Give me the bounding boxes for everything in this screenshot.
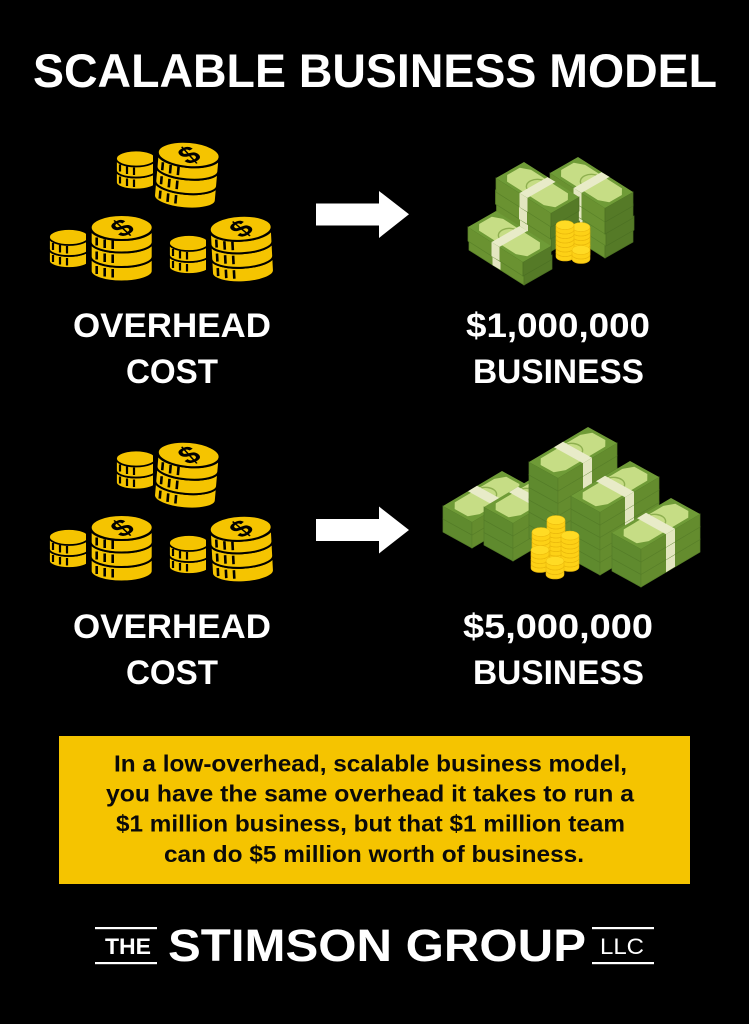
label: overhead cost, row 2 [73, 608, 271, 692]
callout text: can do $5 million worth of business. [164, 841, 584, 867]
label: $5,000,000 business: BUSINESS [473, 654, 644, 692]
label: $1,000,000 business: $1,000,000 [466, 307, 650, 345]
logo: The Stimson Group LLC [95, 920, 654, 971]
callout text [106, 750, 634, 867]
icon: overhead coins, row 2: $ [104, 514, 141, 543]
logo: The Stimson Group LLC: STIMSON GROUP [168, 920, 586, 971]
icon: money stacks, $5,000,000 [443, 427, 700, 587]
arrow, row 2 [316, 506, 409, 554]
title: SCALABLE BUSINESS MODEL [33, 44, 717, 97]
label: $1,000,000 business: BUSINESS [473, 353, 644, 391]
icon: overhead coins, row 2: $ [223, 515, 261, 543]
label: overhead cost, row 2: OVERHEAD [73, 608, 271, 646]
label: overhead cost, row 1: COST [126, 353, 218, 391]
arrow, row 1 [316, 191, 409, 238]
icon: overhead coins, row 2 [49, 438, 274, 584]
icon: overhead coins, row 1 [49, 138, 274, 284]
icon: overhead coins, row 2: $ [172, 441, 208, 470]
label: $1,000,000 business [466, 307, 650, 391]
icon: overhead coins, row 1: $ [172, 141, 208, 170]
icon: overhead coins, row 1: $ [223, 215, 261, 243]
label: overhead cost, row 1: OVERHEAD [73, 307, 271, 345]
label: $5,000,000 business: $5,000,000 [463, 608, 653, 646]
logo: The Stimson Group LLC: THE [105, 934, 151, 959]
label: overhead cost, row 1 [73, 307, 271, 391]
callout text: you have the same overhead it takes to run a [106, 780, 634, 806]
logo: The Stimson Group LLC: LLC [600, 934, 644, 959]
label: overhead cost, row 2: COST [126, 654, 218, 692]
callout text: In a low-overhead, scalable business model, [114, 750, 627, 776]
icon: money stacks, $1,000,000 [468, 157, 634, 285]
icon: overhead coins, row 1: $ [104, 214, 141, 243]
callout panel [59, 736, 690, 884]
callout text: $1 million business, but that $1 million team [116, 810, 625, 836]
label: $5,000,000 business [463, 608, 653, 692]
